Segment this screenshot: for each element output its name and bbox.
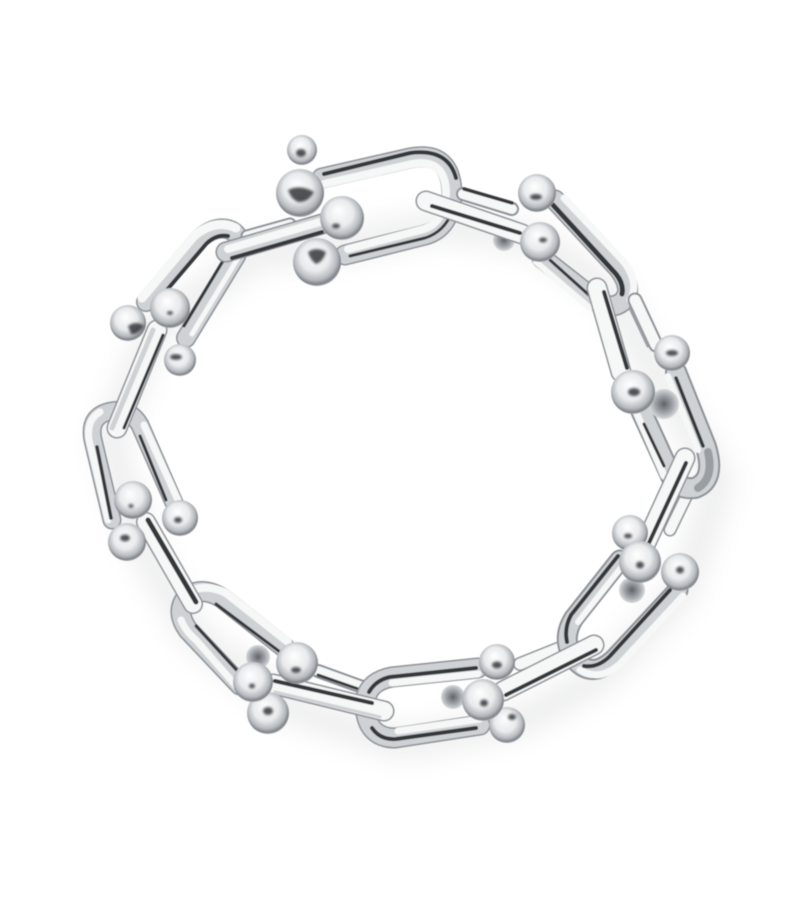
link: right U-link: [636, 372, 710, 488]
inner pin ends: [246, 229, 679, 709]
thin bar behind top-right joint: [463, 189, 512, 209]
balls: right: [611, 335, 690, 414]
link: bottom U-link: [365, 668, 480, 739]
balls: left: [108, 481, 198, 561]
link: top clasp U-link: [322, 152, 456, 256]
balls: bottom-right: [612, 515, 699, 591]
balls: top-left: [110, 288, 196, 376]
thin bar behind bottom joint: [520, 648, 560, 664]
pin bar: left: [146, 520, 196, 604]
pin bar: bottom-left: [273, 681, 384, 717]
link: top-right U-link: [536, 198, 634, 308]
link: left U-link: [88, 411, 178, 520]
pin bar: top-right: [426, 201, 522, 234]
soft shadow under bracelet: [109, 225, 719, 745]
balls: bottom: [462, 644, 525, 743]
pin bar: bottom-right: [645, 458, 686, 545]
pin bar: right: [597, 288, 627, 372]
link: top-left U-link: [142, 224, 240, 338]
balls: top clasp: [276, 135, 364, 286]
link: bottom-left U-link: [181, 588, 288, 688]
pin bar: top-left: [112, 330, 163, 428]
balls: top-right: [518, 174, 560, 262]
thin bar behind right joint: [670, 497, 686, 530]
balls: bottom-left: [233, 642, 318, 734]
thin bar behind top-left joint: [247, 224, 290, 236]
thin bar behind right-top joint: [630, 300, 656, 346]
pin bar: bottom: [503, 645, 596, 695]
link: bottom-right U-link: [566, 556, 683, 675]
thin bar behind bottom-left joint: [318, 671, 365, 691]
pin bar: top clasp: [226, 222, 322, 258]
